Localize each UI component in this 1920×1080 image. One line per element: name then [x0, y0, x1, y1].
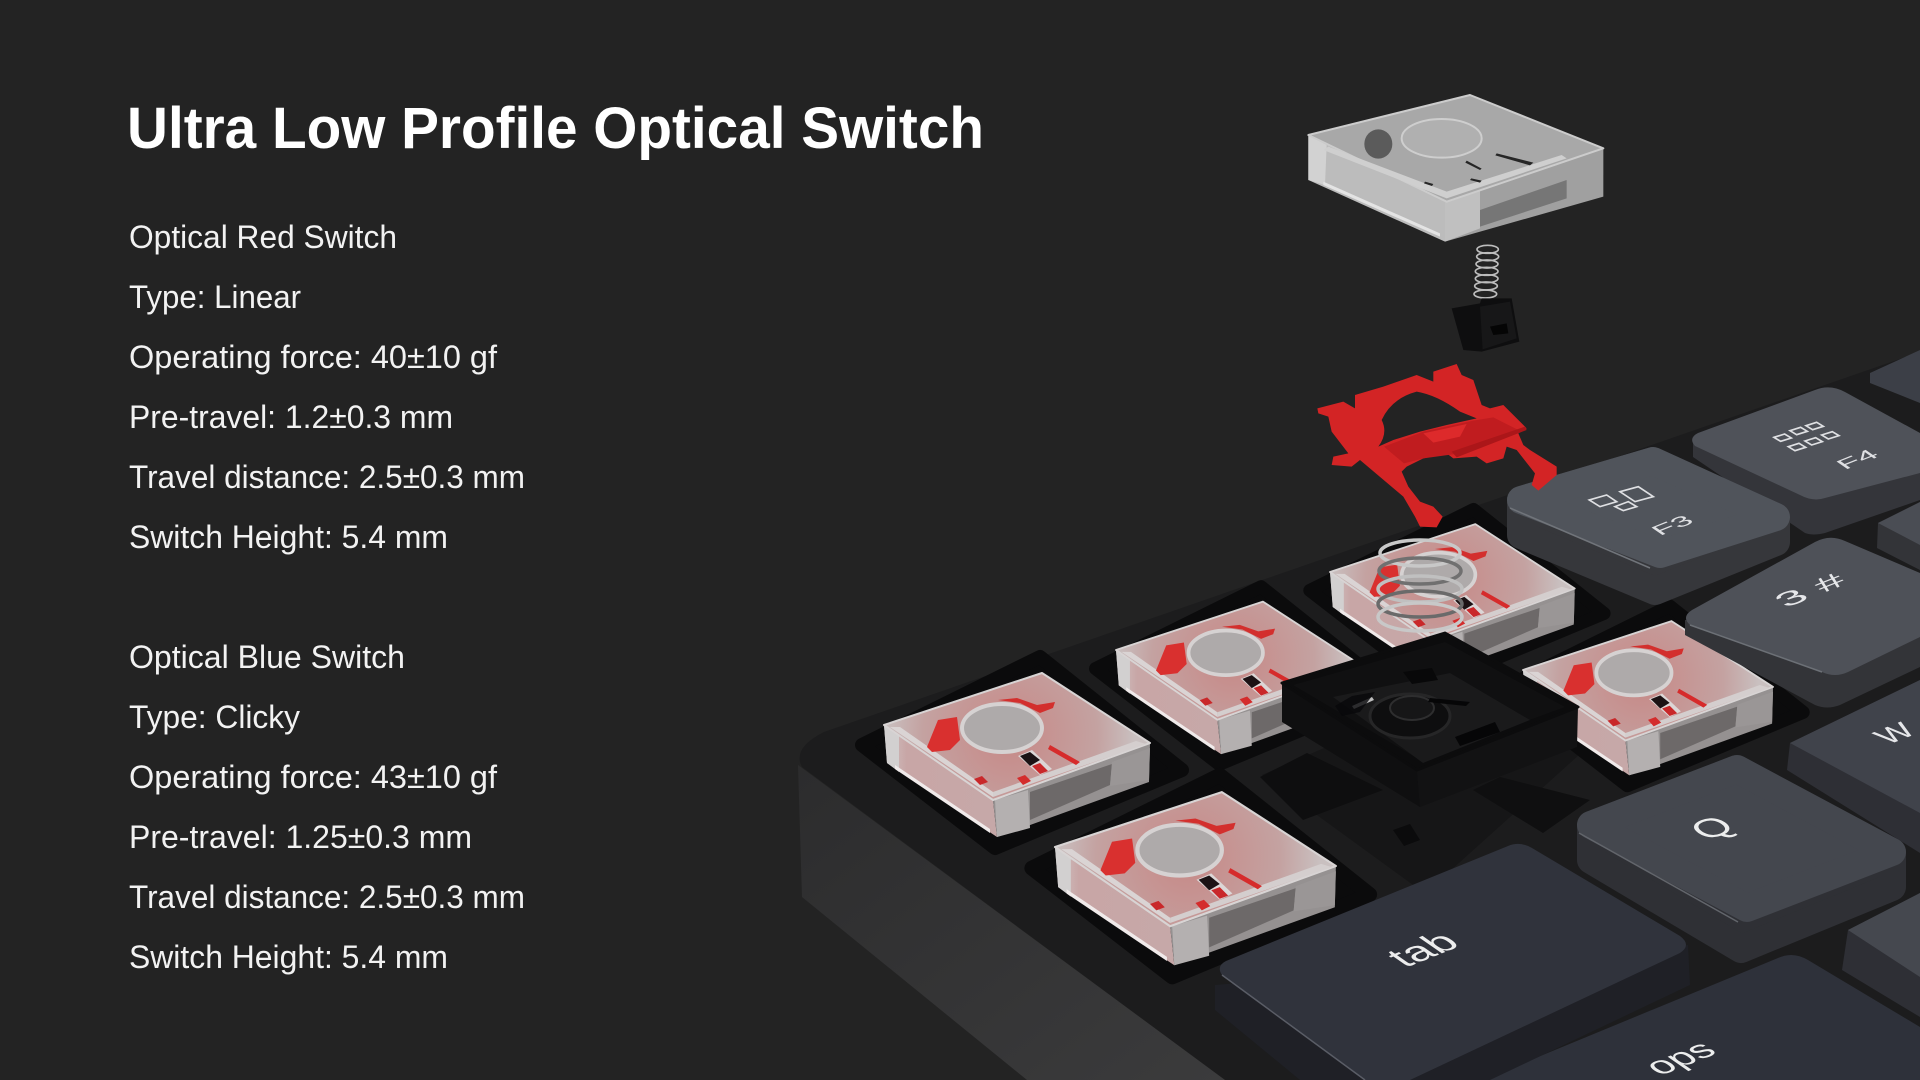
keycap: F4: [1692, 387, 1920, 534]
switch: front: [1032, 775, 1370, 977]
keycap: top-right partial: [1870, 350, 1920, 403]
keycap: F3: [1510, 461, 1776, 591]
switch: front left: [862, 657, 1182, 848]
specs: optical blue switch: [129, 639, 525, 975]
specs: optical blue switch: Pre-travel: 1.25±0.3 mm: [129, 819, 472, 855]
specs: optical red switch: Type: Linear: [129, 279, 301, 315]
specs: optical blue switch: Switch Height: 5.4 mm: [129, 939, 448, 975]
keycap: Q: Q: [1680, 810, 1744, 846]
black switch frame: [1282, 633, 1578, 807]
switch: right: [1502, 606, 1803, 786]
keycap: 3 #: 3 #: [1766, 569, 1854, 611]
keycap: lower right partial: [1842, 893, 1920, 1017]
keycap: caps: [1482, 955, 1920, 1080]
keyboard illustration: [798, 350, 1920, 1080]
exploded switch parts: [1308, 95, 1603, 527]
keyboard deck: [800, 352, 1920, 1080]
specs: optical blue switch: Type: Clicky: [129, 699, 300, 735]
red stem: [1317, 364, 1557, 527]
switch: back row left: [1096, 587, 1393, 764]
keycap: Q: [1579, 769, 1892, 949]
keycap: W: [1787, 680, 1920, 853]
title: Ultra Low Profile Optical Switch: [127, 96, 984, 161]
specs: optical red switch: Travel distance: 2.5±0.3 mm: [129, 459, 525, 495]
spring: [1378, 540, 1462, 631]
specs: optical blue switch: Operating force: 43±10 gf: [129, 759, 497, 795]
keyboard side wall: [798, 765, 1225, 1080]
empty switch slot: [1260, 715, 1590, 890]
keycap: caps: ops: [1635, 1035, 1725, 1080]
black slider: [1452, 298, 1519, 352]
specs: optical red switch: Optical Red Switch: [129, 219, 397, 255]
small spring: [1474, 245, 1499, 298]
keycap: F4: F4: [1831, 446, 1884, 473]
keycap: tab: [1215, 844, 1690, 1080]
specs: optical red switch: Switch Height: 5.4 mm: [129, 519, 448, 555]
clear switch housing: [1308, 95, 1603, 242]
specs: optical blue switch: Travel distance: 2.5±0.3 mm: [129, 879, 525, 915]
specs: optical red switch: Operating force: 40±10 gf: [129, 339, 497, 375]
keycap: right of F3: [1877, 502, 1920, 570]
keycap: F3: F3: [1646, 512, 1699, 539]
specs: optical red switch: Pre-travel: 1.2±0.3 mm: [129, 399, 453, 435]
switch: back row right: [1310, 509, 1604, 685]
specs: optical blue switch: Optical Blue Switch: [129, 639, 405, 675]
keycap: tab: tab: [1377, 926, 1469, 973]
specs: optical red switch: [129, 219, 525, 555]
keycap: 3 #: [1685, 538, 1920, 708]
